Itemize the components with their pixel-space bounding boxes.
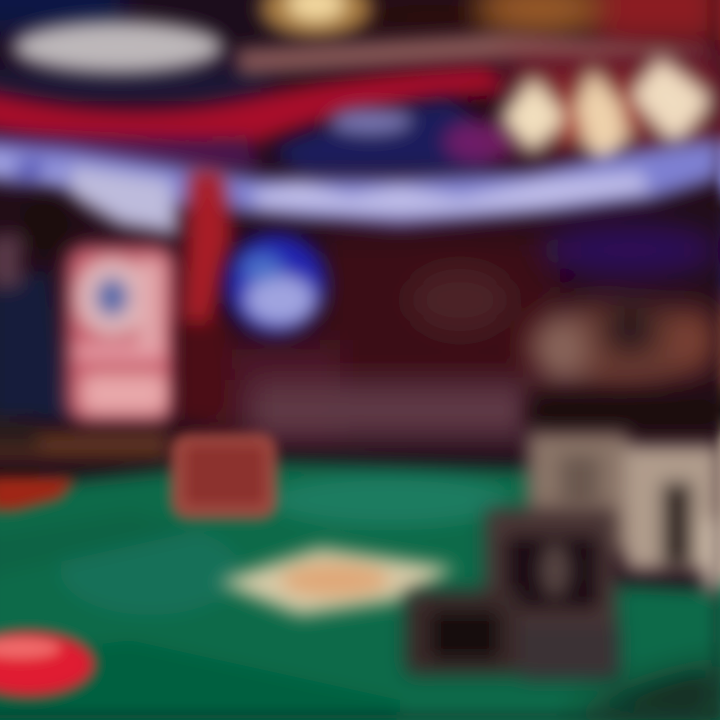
pink patterned column — [66, 245, 176, 423]
navy banner section — [0, 100, 520, 172]
hanging diamond lights — [500, 56, 720, 172]
beige ceiling band — [235, 34, 720, 74]
dark chip stacks — [405, 508, 620, 680]
crowd band — [250, 380, 530, 440]
ceiling light — [260, 0, 372, 38]
beige chip stacks right — [528, 432, 720, 590]
red dice block — [172, 434, 276, 518]
green felt table — [0, 462, 720, 720]
orange chip left — [0, 478, 75, 510]
dark middle wall — [200, 235, 560, 430]
white ceiling panel — [13, 21, 223, 73]
red chip front left — [0, 632, 94, 696]
blue glowing circle — [226, 234, 326, 334]
dark ledge — [0, 395, 720, 458]
cream cards — [218, 548, 455, 615]
ceiling background — [0, 0, 720, 110]
right side crowd — [525, 224, 720, 390]
dark bottom right shadow — [570, 665, 720, 720]
lit blue white band — [0, 138, 720, 235]
left dark figure — [0, 193, 73, 425]
red column — [178, 170, 232, 420]
red banner band — [0, 55, 720, 152]
